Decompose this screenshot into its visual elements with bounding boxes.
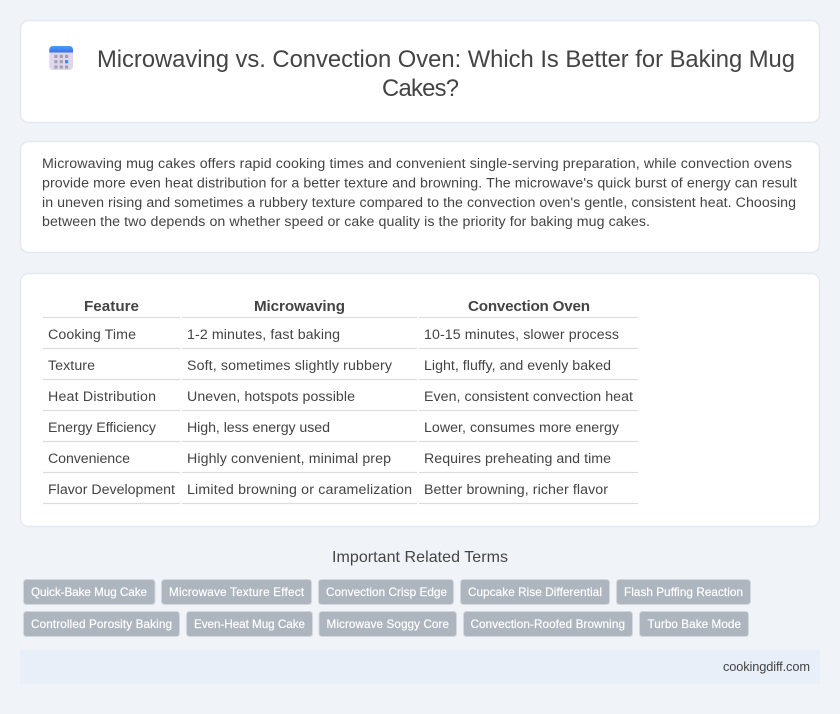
row: convenience: Convenience <box>48 451 130 467</box>
related term tags <box>24 580 750 636</box>
tag <box>464 612 632 636</box>
row: heat distribution: Uneven, hotspots possible <box>187 389 355 405</box>
row: convenience: Highly convenient, minimal prep <box>187 451 391 467</box>
row: flavor development: Limited browning or caramelization <box>187 482 412 498</box>
row: convenience <box>48 451 611 467</box>
tag <box>186 612 312 636</box>
tag: Even-Heat Mug Cake <box>194 618 305 631</box>
row: flavor development: Flavor Development <box>48 482 175 498</box>
heading: related terms: Important Related Terms <box>332 549 508 566</box>
panel: comparison table <box>20 274 820 526</box>
tag <box>318 580 454 604</box>
tag <box>460 580 610 604</box>
title: Microwaving vs. Convection Oven: Which Is Better for Baking Mug <box>97 46 795 73</box>
panel: header <box>20 20 820 122</box>
row: cooking time <box>48 327 619 343</box>
row: energy efficiency: Lower, consumes more energy <box>424 420 620 436</box>
row: texture <box>48 358 611 374</box>
row: energy efficiency: Energy Efficiency <box>48 420 157 436</box>
row: cooking time: 10-15 minutes, slower process <box>424 327 619 343</box>
tag: Flash Puffing Reaction <box>624 586 743 599</box>
footer: cookingdiff.com <box>723 659 810 674</box>
table header <box>84 298 590 315</box>
tag <box>640 612 748 636</box>
tag: Microwave Texture Effect <box>169 586 305 599</box>
tag: Convection Crisp Edge <box>326 586 447 599</box>
row: flavor development <box>48 482 608 498</box>
row: heat distribution: Even, consistent convection heat <box>424 389 633 405</box>
panel: introduction text <box>20 142 820 252</box>
panel: introduction text: between the two depends on whether speed or cake quality is the priority for baking mug cakes. <box>42 214 650 230</box>
icon: calendar <box>49 46 73 70</box>
row: texture: Light, fluffy, and evenly baked <box>424 358 611 374</box>
row: cooking time: Cooking Time <box>48 327 136 343</box>
tag <box>616 580 750 604</box>
row: texture: Texture <box>48 358 95 374</box>
row: heat distribution <box>48 389 633 405</box>
row: energy efficiency <box>48 420 620 436</box>
tag <box>24 612 180 636</box>
row: cooking time: 1-2 minutes, fast baking <box>187 327 340 343</box>
panel: introduction text: in uneven rising and sometimes a rubbery texture compared to the convection oven's gentle, consistent heat. Choosing <box>42 195 796 211</box>
footer <box>20 650 820 684</box>
row: energy efficiency: High, less energy used <box>187 420 330 436</box>
tag: Quick-Bake Mug Cake <box>31 586 147 599</box>
panel: introduction text: Microwaving mug cakes offers rapid cooking times and convenient single-serving preparation, while convection ovens <box>42 156 792 172</box>
table header: Microwaving <box>254 298 345 315</box>
tag <box>162 580 312 604</box>
tag: Cupcake Rise Differential <box>468 586 602 599</box>
tag: Controlled Porosity Baking <box>31 618 172 631</box>
tag: Microwave Soggy Core <box>326 618 449 631</box>
panel: introduction text: provide more even heat distribution for a better texture and browning. The microwave's quick burst of energy can result <box>42 176 797 192</box>
tag: Turbo Bake Mode <box>648 618 741 631</box>
row: texture: Soft, sometimes slightly rubbery <box>187 358 393 374</box>
row: heat distribution: Heat Distribution <box>48 389 156 405</box>
title: Cakes? <box>382 75 459 102</box>
tag: Convection-Roofed Browning <box>470 618 625 631</box>
table header: Convection Oven <box>468 298 590 315</box>
tag <box>319 612 456 636</box>
row: convenience: Requires preheating and time <box>424 451 611 467</box>
row: flavor development: Better browning, richer flavor <box>424 482 608 498</box>
title <box>97 46 795 102</box>
table header: Feature <box>84 298 139 315</box>
tag <box>24 580 155 604</box>
